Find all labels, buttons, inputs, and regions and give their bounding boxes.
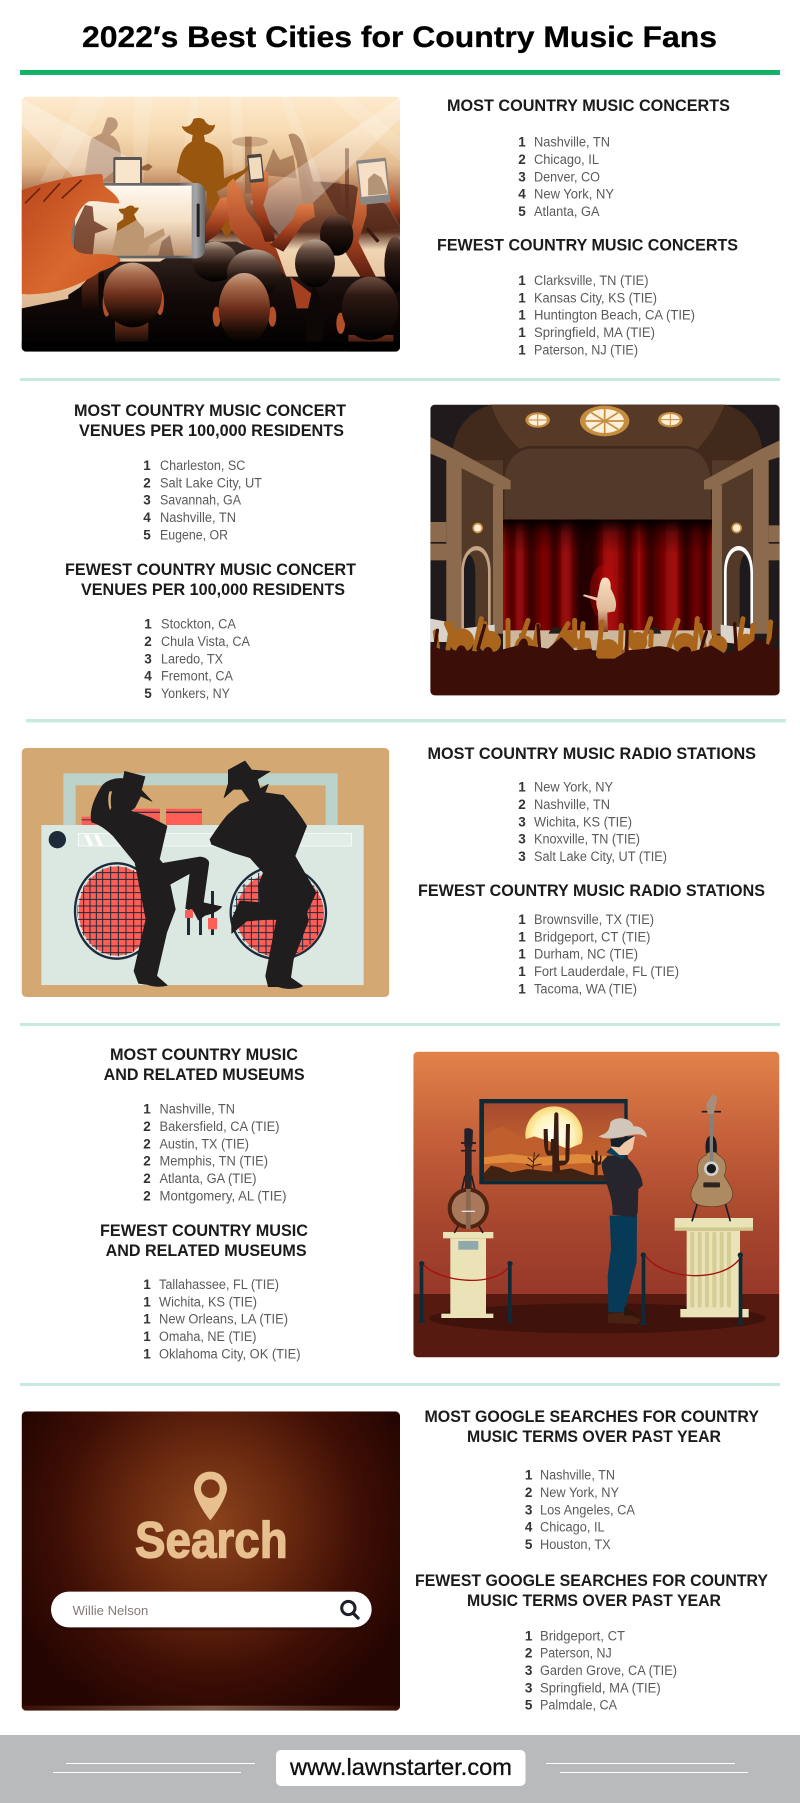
singer — [583, 578, 616, 632]
list: most radio stations: 1 — [518, 780, 526, 795]
list: most museums: Nashville, TN — [160, 1102, 235, 1117]
list: most venues — [143, 458, 262, 542]
list: most venues: Savannah, GA — [160, 493, 241, 508]
heading: fewest concerts: FEWEST COUNTRY MUSIC CONCERTS — [437, 237, 738, 255]
list: most museums: 2 — [143, 1171, 151, 1186]
heading: fewest venues: FEWEST COUNTRY MUSIC CONCERT — [65, 561, 356, 579]
list: fewest venues: 2 — [144, 634, 152, 649]
list: most searches: 2 — [525, 1485, 532, 1500]
list: most searches: 3 — [525, 1502, 533, 1517]
rope stanchions — [418, 1252, 744, 1325]
crowd base — [22, 242, 400, 352]
list: fewest concerts: Huntington Beach, CA (TIE) — [534, 308, 695, 323]
list: fewest radio stations: Brownsville, TX (TIE) — [534, 912, 654, 927]
crowd arms — [435, 619, 771, 667]
list: fewest searches: 1 — [525, 1628, 533, 1643]
light beams — [22, 97, 400, 235]
list: fewest concerts: Clarksville, TN (TIE) — [534, 273, 648, 288]
heading: most venues — [74, 402, 346, 440]
list: fewest museums: 1 — [143, 1294, 151, 1309]
list: fewest concerts: 1 — [518, 342, 526, 357]
list: fewest searches: Springfield, MA (TIE) — [540, 1680, 661, 1695]
list: most concerts: Nashville, TN — [534, 135, 610, 150]
list: most radio stations — [518, 780, 667, 864]
cassettes — [82, 809, 202, 825]
list: fewest radio stations: Bridgeport, CT (TIE) — [534, 929, 650, 944]
heading: most museums: MOST COUNTRY MUSIC — [110, 1046, 298, 1064]
list: fewest radio stations: 1 — [518, 964, 526, 979]
list: most searches: New York, NY — [540, 1485, 619, 1500]
list: most museums: 2 — [143, 1119, 151, 1134]
panel: theater illustration — [430, 405, 780, 695]
list: fewest concerts: 1 — [518, 308, 526, 323]
heading: most searches — [424, 1408, 759, 1446]
man in hat — [598, 1118, 647, 1324]
lead cowboy — [177, 118, 250, 238]
list: most venues: Nashville, TN — [160, 510, 236, 525]
list: fewest concerts: 1 — [518, 273, 526, 288]
list: most venues: 1 — [143, 458, 151, 473]
list: most museums: Atlanta, GA (TIE) — [160, 1171, 256, 1186]
heading: fewest venues: VENUES PER 100,000 RESIDENTS — [81, 581, 345, 599]
list: fewest venues: 1 — [144, 617, 152, 632]
list: fewest concerts: Paterson, NJ (TIE) — [534, 342, 638, 357]
footer band — [0, 1735, 800, 1803]
list: most museums: Austin, TX (TIE) — [160, 1136, 249, 1151]
list: fewest venues: Laredo, TX — [161, 651, 223, 666]
list: most venues: Salt Lake City, UT — [160, 475, 262, 490]
sliders — [185, 891, 217, 935]
list: fewest concerts: 1 — [518, 290, 526, 305]
list: fewest radio stations: Durham, NC (TIE) — [534, 947, 638, 962]
website pill — [276, 1750, 526, 1786]
list: most searches: 5 — [525, 1537, 533, 1552]
list: most concerts: 2 — [518, 152, 526, 167]
list: most searches — [525, 1468, 635, 1552]
list: most venues: Eugene, OR — [160, 527, 228, 542]
list: fewest venues — [144, 617, 250, 701]
list: most searches: Chicago, IL — [540, 1520, 605, 1535]
list: fewest museums: Wichita, KS (TIE) — [159, 1294, 257, 1309]
list: fewest museums: 1 — [143, 1329, 151, 1344]
list: most concerts: 1 — [518, 135, 526, 150]
list: fewest searches: 5 — [525, 1698, 533, 1713]
search word: Search — [135, 1511, 288, 1568]
speakers — [75, 863, 327, 959]
list: most searches: Los Angeles, CA — [540, 1502, 635, 1517]
list: most searches: Nashville, TN — [540, 1468, 615, 1483]
left wall — [430, 437, 511, 634]
heading: most searches: MUSIC TERMS OVER PAST YEAR — [467, 1428, 721, 1446]
list: most venues: 2 — [143, 475, 151, 490]
heading: most radio stations: MOST COUNTRY MUSIC RADIO STATIONS — [428, 745, 756, 763]
ceiling windows — [525, 406, 683, 436]
list: fewest radio stations: Tacoma, WA (TIE) — [534, 981, 637, 996]
list: most museums: 1 — [143, 1102, 151, 1117]
list: most radio stations: Knoxville, TN (TIE) — [534, 832, 640, 847]
list: fewest concerts: 1 — [518, 325, 526, 340]
heading: most museums: AND RELATED MUSEUMS — [104, 1066, 305, 1084]
list: most venues: 4 — [143, 510, 151, 525]
right wall — [704, 440, 780, 634]
list: fewest searches: Garden Grove, CA (TIE) — [540, 1663, 677, 1678]
list: fewest museums: Oklahoma City, OK (TIE) — [159, 1346, 300, 1361]
heading: most concerts: MOST COUNTRY MUSIC CONCERTS — [447, 97, 730, 115]
list: most concerts: 3 — [518, 169, 526, 184]
list: fewest searches: 3 — [525, 1680, 533, 1695]
guitar and column — [675, 1094, 753, 1317]
list: most concerts: Atlanta, GA — [534, 204, 600, 219]
list: most radio stations: Salt Lake City, UT (TIE) — [534, 849, 667, 864]
list: most radio stations: Wichita, KS (TIE) — [534, 814, 632, 829]
list: fewest concerts: Springfield, MA (TIE) — [534, 325, 655, 340]
heading: fewest radio stations: FEWEST COUNTRY MUSIC RADIO STATIONS — [418, 882, 765, 900]
list: fewest searches: 2 — [525, 1646, 532, 1661]
heading: fewest museums — [100, 1222, 308, 1260]
list: most radio stations: New York, NY — [534, 780, 613, 795]
list: most museums — [143, 1102, 286, 1203]
stage — [430, 619, 751, 650]
list: most radio stations: 3 — [518, 832, 526, 847]
framed desert picture — [479, 1099, 628, 1184]
list: fewest concerts: Kansas City, KS (TIE) — [534, 290, 657, 305]
list: fewest radio stations: 1 — [518, 947, 526, 962]
list: most concerts — [518, 135, 614, 219]
list: most searches: Houston, TX — [540, 1537, 611, 1552]
list: fewest searches: Palmdale, CA — [540, 1698, 617, 1713]
title rule — [20, 70, 780, 75]
heading: fewest searches — [415, 1572, 768, 1610]
dancer: man — [210, 761, 316, 989]
search bar: Willie Nelson — [73, 1603, 148, 1618]
heading: fewest searches: FEWEST GOOGLE SEARCHES FOR COUNTRY — [415, 1572, 768, 1590]
list: fewest searches: Paterson, NJ — [540, 1646, 612, 1661]
big hand — [22, 174, 121, 294]
list: most searches: 4 — [525, 1520, 533, 1535]
boombox handle — [63, 773, 338, 825]
arms — [162, 172, 400, 277]
heading: most venues: MOST COUNTRY MUSIC CONCERT — [74, 402, 346, 420]
list: fewest venues: Fremont, CA — [161, 669, 233, 684]
list: most concerts: 5 — [518, 204, 526, 219]
list: fewest radio stations: 1 — [518, 912, 526, 927]
list: most venues: Charleston, SC — [160, 458, 246, 473]
list: most searches: 1 — [525, 1468, 533, 1483]
list: fewest searches: Bridgeport, CT — [540, 1628, 625, 1643]
panel: search illustration — [22, 1411, 400, 1711]
list: fewest venues: Yonkers, NY — [161, 686, 230, 701]
list: most museums: 2 — [143, 1136, 151, 1151]
main phone — [70, 183, 205, 258]
list: fewest venues: Stockton, CA — [161, 617, 236, 632]
list: most venues: 5 — [143, 527, 151, 542]
list: most museums: Memphis, TN (TIE) — [160, 1154, 268, 1169]
list: fewest searches: 3 — [525, 1663, 533, 1678]
list: most concerts: 4 — [518, 187, 526, 202]
list: most museums: 2 — [143, 1154, 151, 1169]
list: fewest museums: Omaha, NE (TIE) — [159, 1329, 256, 1344]
list: fewest museums: Tallahassee, FL (TIE) — [159, 1277, 279, 1292]
list: fewest venues: 4 — [144, 669, 152, 684]
list: fewest museums: 1 — [143, 1346, 151, 1361]
list: fewest concerts — [518, 273, 695, 357]
panel: concerts illustration — [22, 97, 406, 352]
list: most concerts: New York, NY — [534, 187, 614, 202]
title: 2022′s Best Cities for Country Music Fans — [82, 21, 717, 54]
crowd heads — [68, 214, 406, 352]
list: fewest venues: 5 — [144, 686, 152, 701]
heading: most venues: VENUES PER 100,000 RESIDENTS — [79, 422, 344, 440]
list: fewest radio stations: 1 — [518, 981, 526, 996]
dancer: woman — [91, 771, 222, 986]
list: most venues: 3 — [143, 493, 151, 508]
phone held up right — [356, 158, 391, 205]
panel: museum illustration — [413, 1052, 779, 1357]
list: fewest museums: 1 — [143, 1277, 151, 1292]
heading: fewest museums: FEWEST COUNTRY MUSIC — [100, 1222, 308, 1240]
list: most museums: 2 — [143, 1188, 151, 1203]
ceiling vault — [453, 404, 762, 470]
list: fewest museums — [143, 1277, 300, 1361]
list: fewest venues: Chula Vista, CA — [161, 634, 250, 649]
list: most radio stations: 2 — [518, 797, 526, 812]
list: fewest venues: 3 — [144, 651, 152, 666]
boombox body — [41, 825, 364, 985]
list: fewest radio stations: Fort Lauderdale, FL (TIE) — [534, 964, 679, 979]
heading: most museums — [104, 1046, 305, 1084]
phone behind — [113, 157, 153, 184]
website pill: www.lawnstarter.com — [289, 1754, 512, 1780]
map pin icon — [194, 1472, 227, 1520]
heading: fewest museums: AND RELATED MUSEUMS — [106, 1242, 307, 1260]
list: most museums: Bakersfield, CA (TIE) — [160, 1119, 280, 1134]
list: fewest searches — [525, 1628, 677, 1713]
list: most concerts: Chicago, IL — [534, 152, 599, 167]
list: fewest radio stations — [518, 912, 679, 996]
heading: fewest venues — [65, 561, 356, 599]
search bar — [51, 1592, 372, 1630]
list: most radio stations: 3 — [518, 849, 526, 864]
list: fewest museums: New Orleans, LA (TIE) — [159, 1312, 288, 1327]
list: most radio stations: Nashville, TN — [534, 797, 610, 812]
banjo and pedestal — [441, 1128, 493, 1318]
phone held up middle — [247, 154, 264, 183]
list: fewest museums: 1 — [143, 1312, 151, 1327]
list: fewest radio stations: 1 — [518, 929, 526, 944]
list: most concerts: Denver, CO — [534, 169, 600, 184]
list: most radio stations: 3 — [518, 814, 526, 829]
heading: fewest searches: MUSIC TERMS OVER PAST YEAR — [467, 1592, 721, 1610]
panel: boombox and dancers illustration — [22, 748, 389, 997]
list: most museums: Montgomery, AL (TIE) — [160, 1188, 286, 1203]
band silhouettes — [83, 117, 400, 242]
curtain — [503, 520, 712, 630]
heading: most searches: MOST GOOGLE SEARCHES FOR COUNTRY — [424, 1408, 759, 1426]
crowd silhouette — [430, 637, 780, 695]
